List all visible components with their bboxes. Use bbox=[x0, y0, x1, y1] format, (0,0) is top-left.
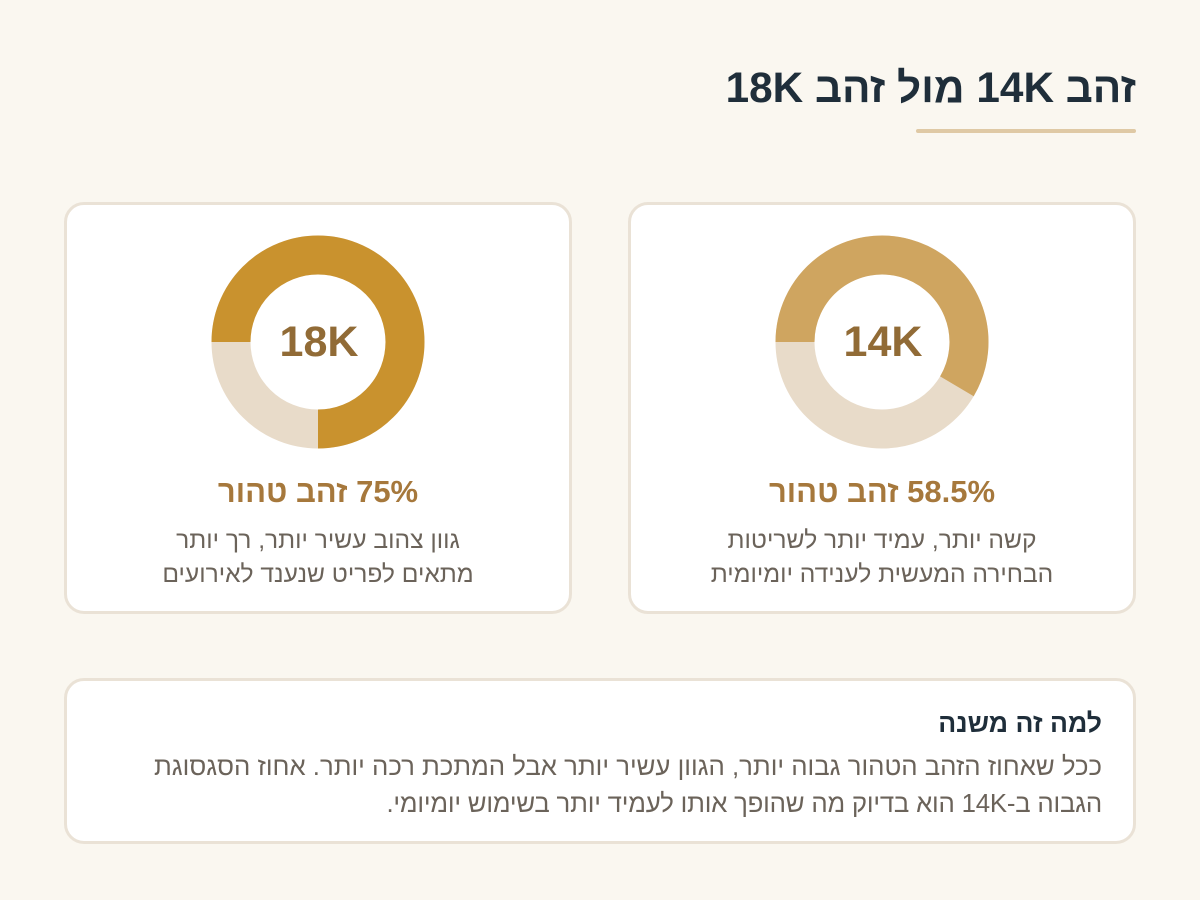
18K purity label: 75% זהב טהור bbox=[218, 474, 418, 509]
donut chart: 14K 58.5%: 14K bbox=[844, 318, 922, 366]
14K description: הבחירה המעשית לענידה יומיומית bbox=[711, 561, 1053, 588]
14K description: קשה יותר, עמיד יותר לשריטות bbox=[728, 527, 1036, 554]
14K description bbox=[711, 527, 1053, 588]
title underline bbox=[916, 129, 1136, 133]
panel: 14K card bbox=[628, 202, 1136, 614]
18K description: גוון צהוב עשיר יותר, רך יותר bbox=[176, 527, 460, 554]
why it matters body bbox=[154, 753, 1102, 818]
donut chart: 14K 58.5% bbox=[776, 236, 988, 448]
14K purity label: 58.5% זהב טהור bbox=[769, 474, 995, 509]
why it matters body: ככל שאחוז הזהב הטהור גבוה יותר, הגוון עשיר יותר אבל המתכת רכה יותר. אחוז הסגסוגת bbox=[154, 753, 1102, 781]
donut chart: 18K 75% bbox=[212, 236, 424, 448]
18K description bbox=[162, 527, 474, 588]
panel: why it matters bbox=[64, 678, 1136, 844]
18K description: מתאים לפריט שנענד לאירועים bbox=[162, 561, 474, 588]
why it matters body: הגבוה ב-14K הוא בדיוק מה שהופך אותו לעמיד יותר בשימוש יומיומי. bbox=[386, 790, 1102, 818]
why it matters heading: למה זה משנה bbox=[938, 708, 1102, 738]
title: זהב 14K מול זהב 18K bbox=[726, 64, 1136, 111]
panel: 18K card bbox=[64, 202, 572, 614]
donut chart: 18K 75%: 18K bbox=[280, 318, 358, 366]
